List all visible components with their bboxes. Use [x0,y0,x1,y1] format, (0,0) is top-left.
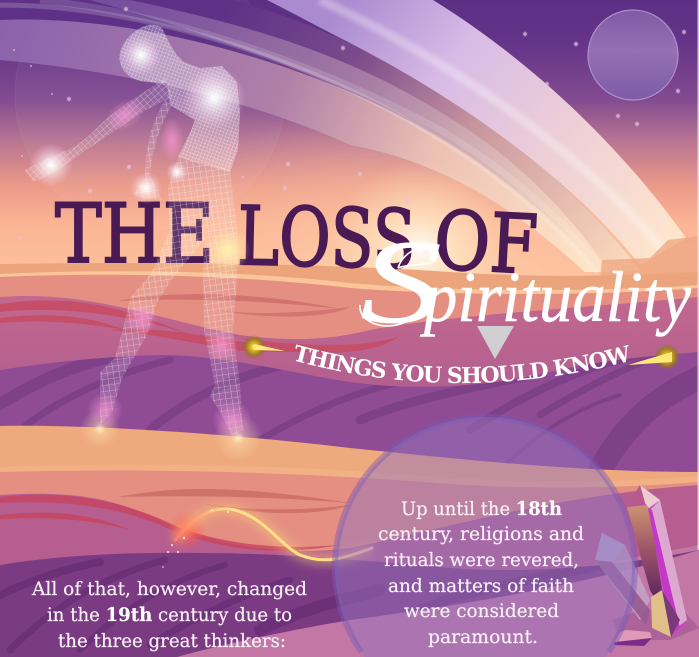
triangle marker [477,326,514,359]
title script: Spirituality [360,215,691,348]
translucent text circle [335,417,635,657]
title: THE LOSS OF: LOSS [237,190,417,288]
lower purple dune with stripes [0,352,699,480]
pale foreground sand [170,545,699,657]
comet left [242,335,285,359]
small crystal [651,590,671,637]
subtitle: Things you should know: THINGS YOU SHOULD KNOW [295,344,628,384]
crystal shadow [612,610,699,640]
text: circle body: paramount. [428,626,538,648]
sky background [0,0,699,300]
text: circle body: and matters of faith [388,575,574,597]
head and torso [120,25,240,172]
arm reaching left [24,78,172,182]
title: THE LOSS OF [55,188,540,293]
text: circle body [378,498,584,648]
text: circle body: century, religions and [378,523,584,545]
text: circle body: Up until the 18th [401,498,562,520]
title: THE LOSS OF: THE [55,188,214,282]
planet [588,10,678,100]
sand layers [0,263,699,657]
upper pink dune [0,296,699,480]
bottom purple dune with stripes [0,550,699,657]
decorative swashes on the capital S [360,247,437,326]
text: lower left body: the three great thinkers: [58,630,286,652]
text: lower left body: All of that, however, changed [31,578,307,600]
lower pink dune [0,485,699,657]
legs [100,157,243,436]
faint halo circle [15,0,285,230]
text: circle body: were considered [404,600,559,622]
sparkle wave [162,509,372,568]
glow under feet [80,409,262,462]
text: circle body: rituals were revered, [384,549,579,571]
stars [13,6,687,239]
right edge strip [698,0,699,550]
planetary rings [0,0,686,272]
rock formation on the horizon [600,236,699,288]
comet right [628,344,680,370]
title script: Spirituality: S [360,215,442,348]
text: lower left body [31,578,307,652]
crystals [595,485,699,646]
red streaks on lower dune [0,495,340,551]
left translucent crystal [595,533,650,620]
text: lower left body: in the 19th century due to [47,604,292,626]
arm hanging down [133,100,172,200]
warm glow under the rings [130,95,690,475]
main crystal [627,485,687,636]
sun glow behind title [330,160,510,340]
wireframe figure [24,25,252,440]
figure glow points [29,35,252,440]
small fallen crystal [615,630,652,642]
title: THE LOSS OF: OF [432,194,540,293]
peach sand band [0,426,699,560]
red streaks on upper dune [0,300,400,353]
